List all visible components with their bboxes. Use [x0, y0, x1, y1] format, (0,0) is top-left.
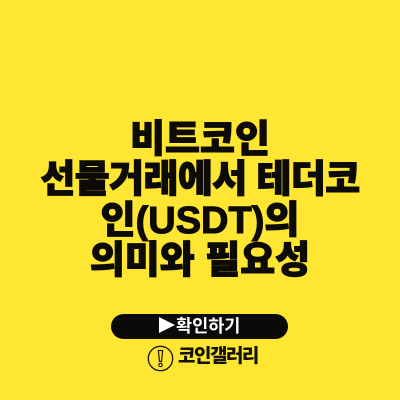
- title: 의미와 필요성: [90, 240, 310, 282]
- title: 비트코인: [130, 119, 270, 161]
- icon: exclamation circle: [148, 346, 174, 372]
- title: [40, 119, 360, 282]
- button label: 확인하기: [176, 316, 240, 336]
- brand logo: [148, 346, 258, 372]
- icon: play triangle: [159, 317, 175, 333]
- title: 인(USDT)의: [101, 200, 299, 242]
- title: 선물거래에서 테더코: [40, 159, 360, 201]
- button: 확인하기: [111, 314, 288, 339]
- brand name: 코인갤러리: [178, 346, 258, 367]
